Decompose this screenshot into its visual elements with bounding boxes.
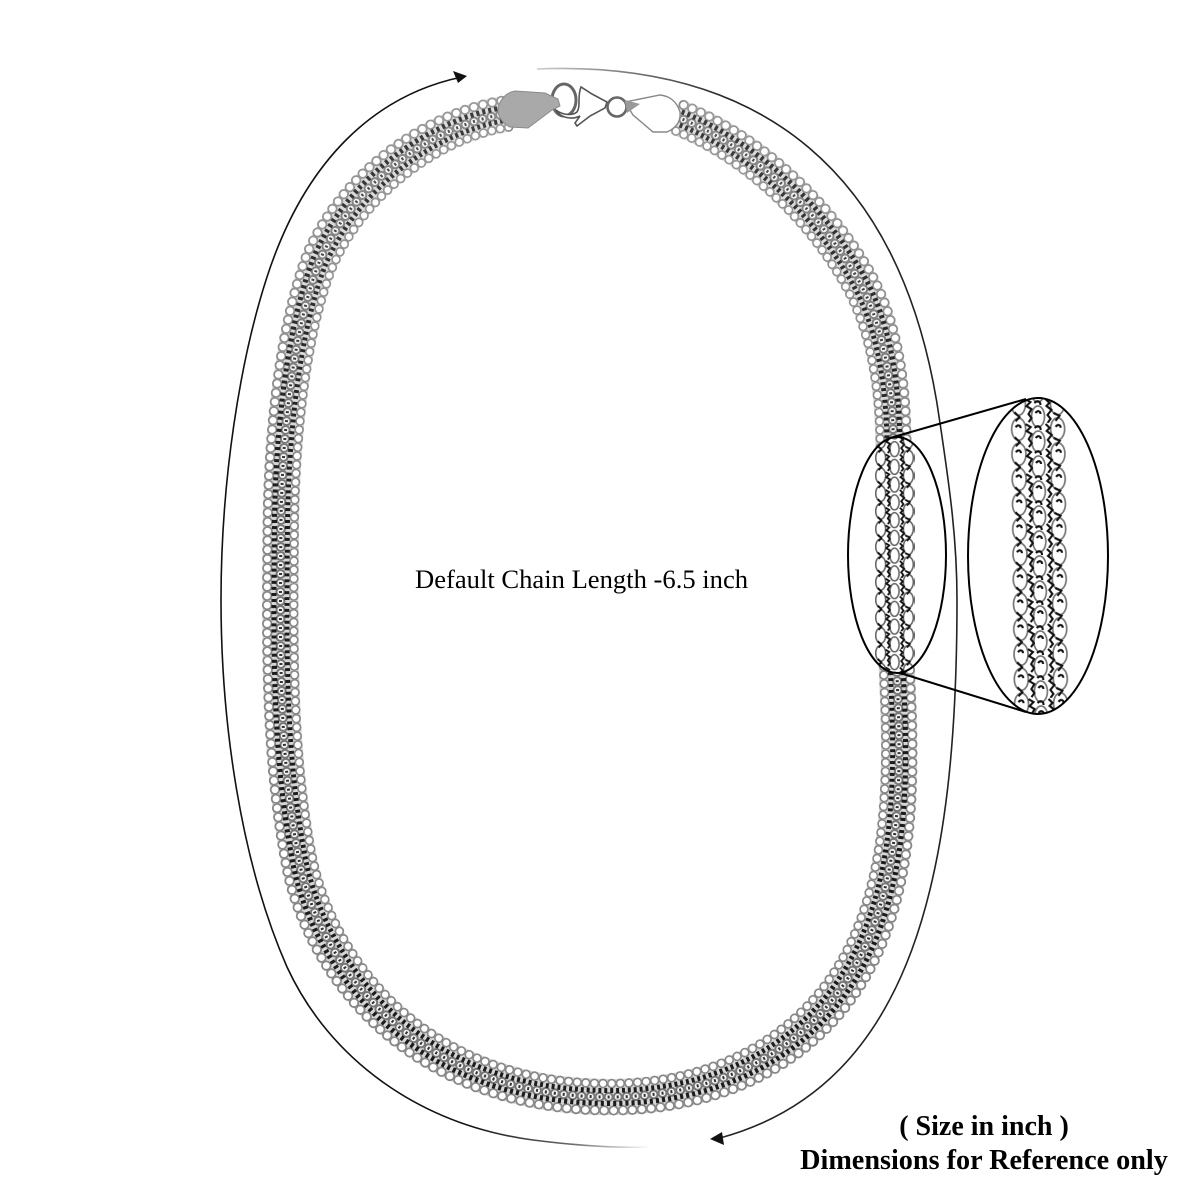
center label: Default Chain Length -6.5 inch (415, 564, 748, 594)
right dimension arc with arrow (537, 68, 957, 1145)
small ring (608, 98, 626, 116)
arrowhead bottom (710, 1132, 724, 1145)
zoom circle on chain (848, 436, 946, 676)
left dimension arc with arrow (221, 71, 650, 1147)
zoom connector lines (890, 399, 1026, 712)
left end cap (498, 91, 560, 128)
size unit: ( Size in inch ) (899, 1111, 1069, 1142)
chain necklace (267, 101, 912, 1110)
right end cap (625, 95, 680, 132)
size note (800, 1111, 1168, 1176)
clasp (498, 84, 680, 132)
magnified chain inset (968, 390, 1108, 720)
reference disclaimer: Dimensions for Reference only (800, 1145, 1168, 1176)
lobster clasp (556, 87, 607, 126)
arrowhead top (453, 71, 467, 83)
jump ring (552, 84, 576, 116)
